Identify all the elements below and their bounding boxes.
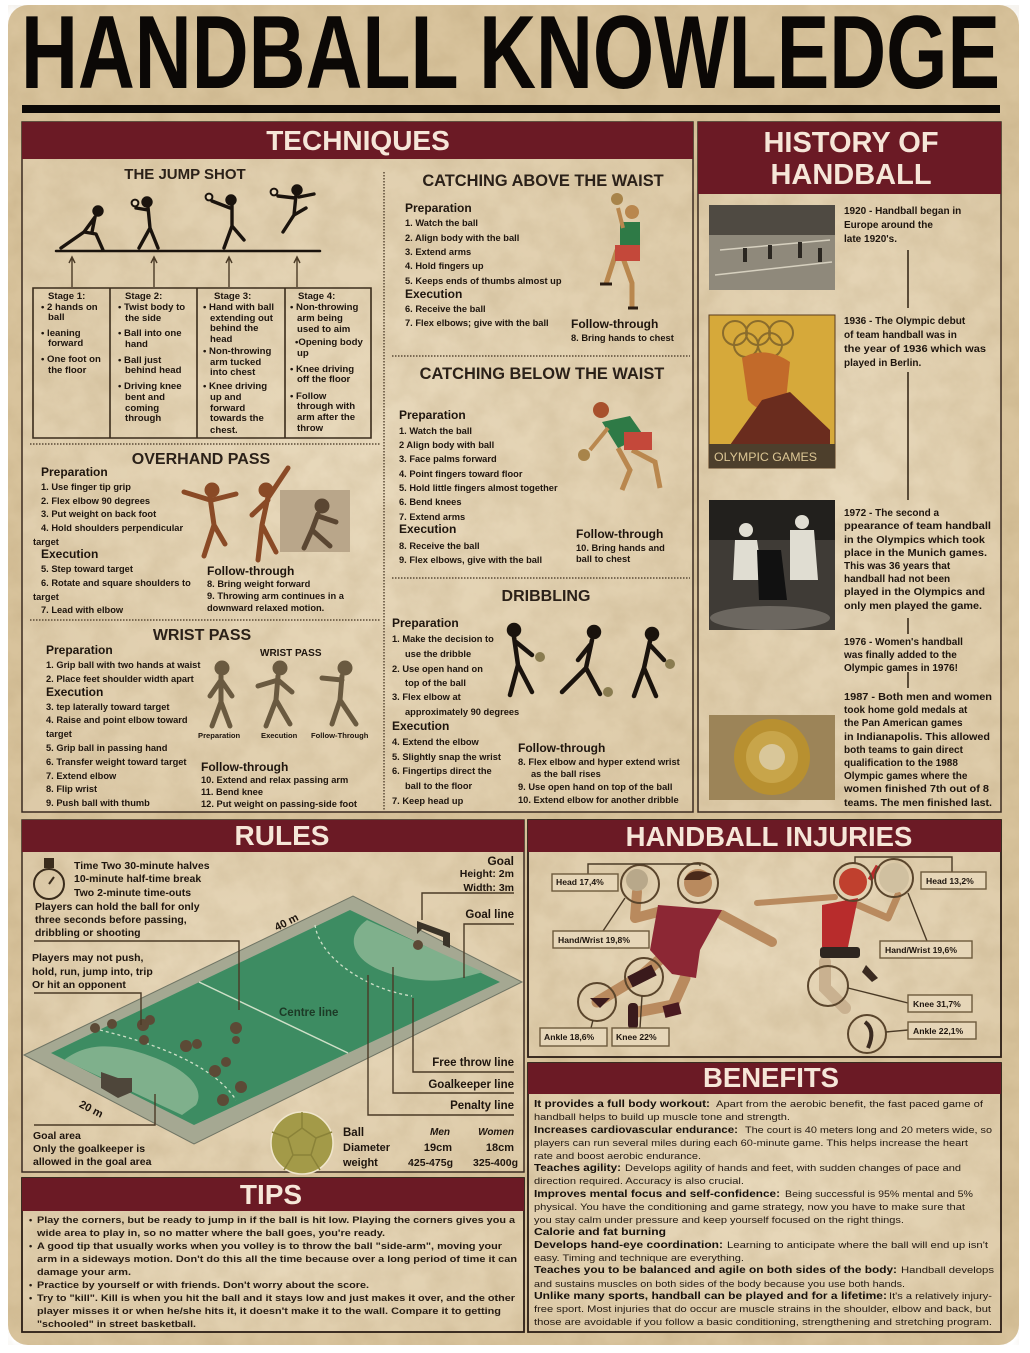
injury circles bbox=[578, 859, 913, 1053]
section: wrist pass: Execution bbox=[46, 685, 103, 699]
benefits list: Being successful is 95% mental and 5% bbox=[785, 1189, 974, 1200]
benefits list: direction required. Accuracy is also crucial. bbox=[534, 1176, 744, 1187]
section: wrist pass: 1. Grip ball with two hands at waist bbox=[46, 660, 200, 670]
text: goal: Height: 2m bbox=[460, 868, 514, 880]
icon: wrist pass figures bbox=[210, 663, 356, 726]
stage 4 text: off the floor bbox=[297, 374, 351, 385]
text: 1987: teams. The men finished last. bbox=[844, 798, 992, 809]
section: overhand pass: 6. Rotate and square shoulders to bbox=[41, 578, 191, 588]
benefits list: handball helps to build up muscle tone and strength. bbox=[534, 1112, 790, 1123]
section: catching below the waist: 8. Receive the ball bbox=[399, 541, 480, 551]
ball size table: Diameter bbox=[343, 1142, 391, 1154]
stage 2 text: behind head bbox=[125, 365, 182, 376]
stage 4 text: up bbox=[297, 348, 309, 359]
players bbox=[90, 940, 423, 1106]
benefits list: Apart from the aerobic benefit, the fast paced game of bbox=[716, 1099, 983, 1110]
injury labels: Head 13,2% bbox=[926, 876, 974, 886]
section: catching below the waist: 3. Face palms forward bbox=[399, 454, 497, 464]
text: goal bbox=[460, 854, 514, 921]
benefits list: free sport. Most injuries that do occur are muscle strains in the shoulder, elbow and back, but bbox=[534, 1304, 991, 1315]
section: dribbling: 2. Use open hand on bbox=[392, 664, 483, 674]
section: dribbling: 4. Extend the elbow bbox=[392, 737, 480, 747]
section: catching above the waist: 5. Keeps ends of thumbs almost up bbox=[405, 276, 562, 286]
ball size table: Women bbox=[478, 1127, 514, 1138]
text: 1987 bbox=[843, 692, 992, 809]
injury labels: Knee 22% bbox=[616, 1032, 657, 1042]
section: overhand pass: Preparation bbox=[41, 465, 108, 479]
benefits list: Handball develops bbox=[901, 1265, 994, 1276]
text: goal: Goal line bbox=[465, 909, 514, 921]
section: catching above the waist bbox=[405, 172, 674, 343]
section: catching below the waist: ball to chest bbox=[576, 554, 630, 564]
section: overhand pass: 2. Flex elbow 90 degrees bbox=[41, 496, 150, 506]
section: dribbling: 5. Slightly snap the wrist bbox=[392, 752, 501, 762]
stage 3 text: Stage 3: bbox=[214, 291, 251, 302]
text: time rules: Two 2-minute time-outs bbox=[74, 887, 191, 899]
section: wrist pass: 2. Place feet shoulder width apart bbox=[46, 674, 194, 684]
tips list: Try to "kill". Kill is when you hit the ball and it stays low and just makes it over, and the other bbox=[37, 1293, 515, 1303]
text: 1936: 1936 - The Olympic debut bbox=[844, 316, 966, 327]
stage 2 text: • Ball just bbox=[118, 355, 162, 366]
heading: history bbox=[763, 127, 939, 191]
stage 3 text: • Hand with ball bbox=[203, 302, 274, 313]
ball size table: Men bbox=[430, 1127, 450, 1138]
section: catching above the waist: Follow-through bbox=[571, 317, 658, 331]
icon: near goal bbox=[101, 1072, 132, 1098]
section: wrist pass: 12. Put weight on passing-side foot bbox=[201, 799, 357, 809]
section: catching above the waist: CATCHING ABOVE THE WAIST bbox=[422, 172, 664, 190]
benefits list: rate and boost aerobic endurance. bbox=[534, 1151, 701, 1162]
injury labels: Knee 31,7% bbox=[913, 999, 961, 1009]
stage 4 text: arm being bbox=[297, 313, 343, 324]
benefits list: Improves mental focus and self-confidence: bbox=[534, 1188, 780, 1200]
stage 2 text: through bbox=[125, 413, 161, 424]
section: catching above the waist: 2. Align body with the ball bbox=[405, 233, 519, 243]
stage 1 text: • leaning bbox=[41, 328, 81, 339]
leader lines bbox=[34, 893, 514, 1125]
heading: history: HANDBALL bbox=[770, 159, 932, 191]
tips list: player misses it or when he/she hits it, it doesn't make it to the wall. Compare it to getting bbox=[37, 1306, 501, 1316]
section: wrist pass: Execution bbox=[261, 731, 298, 740]
section: wrist pass: 3. tep laterally toward target bbox=[46, 702, 169, 712]
text: line labels: Penalty line bbox=[450, 1100, 514, 1112]
text: 1976: was finally added to the bbox=[843, 650, 957, 661]
injury labels: Ankle 22,1% bbox=[913, 1026, 964, 1036]
section: wrist pass: 10. Extend and relax passing arm bbox=[201, 775, 348, 785]
photo: gold medal bbox=[709, 715, 835, 800]
stage 3 text: • Non-throwing bbox=[203, 346, 272, 357]
section: catching above the waist: 7. Flex elbows; give with the ball bbox=[405, 318, 549, 328]
icon: catching above figure bbox=[600, 193, 640, 308]
text: time rules: 10-minute half-time break bbox=[74, 873, 201, 885]
icon: catching below figure bbox=[578, 402, 660, 490]
stage 2 text: • Driving knee bbox=[118, 381, 182, 392]
benefits list: physical. You have the conditioning and game strategy, now you have to make sure that bbox=[534, 1202, 965, 1213]
tips list: damage your arm. bbox=[37, 1267, 131, 1277]
section: catching below the waist bbox=[399, 365, 665, 565]
text: time rules: Time Two 30-minute halves bbox=[74, 860, 210, 872]
poster: 1936 olympics: OLYMPIC GAMES bbox=[714, 450, 817, 464]
section: wrist pass: 6. Transfer weight toward target bbox=[46, 757, 187, 767]
section: dribbling: Execution bbox=[392, 719, 449, 733]
heading: rules: RULES bbox=[235, 820, 329, 851]
icon: overhand pass figures bbox=[184, 468, 350, 560]
heading: injuries: HANDBALL INJURIES bbox=[626, 821, 912, 852]
section: dribbling: 7. Keep head up bbox=[392, 796, 464, 806]
text: 1987: Olympic games where the bbox=[844, 771, 968, 782]
section: overhand pass: 9. Throwing arm continues in a bbox=[207, 591, 345, 601]
section: dribbling: ball to the floor bbox=[405, 781, 473, 791]
injury labels: Head 17,4% bbox=[556, 877, 604, 887]
stage 2 text: hand bbox=[125, 339, 148, 350]
text: goal area: Only the goalkeeper is bbox=[33, 1143, 145, 1155]
icon: jump shot figures bbox=[56, 186, 320, 251]
stage 3 text: into chest bbox=[210, 367, 256, 378]
section: dribbling: top of the ball bbox=[405, 678, 466, 688]
section: catching above the waist: Preparation bbox=[405, 201, 472, 215]
section: catching above the waist: 1. Watch the ball bbox=[405, 218, 478, 228]
section: the jump shot bbox=[33, 166, 371, 438]
section: dribbling: 6. Fingertips direct the bbox=[392, 766, 492, 776]
text: line labels: Goalkeeper line bbox=[428, 1079, 514, 1091]
benefits list: Teaches you to be balanced and agile on both sides of the body: bbox=[534, 1264, 897, 1276]
section: catching above the waist: Execution bbox=[405, 287, 462, 301]
section: wrist pass: Follow-through bbox=[201, 760, 288, 774]
section: wrist pass: 8. Flip wrist bbox=[46, 784, 97, 794]
section: catching below the waist: Preparation bbox=[399, 408, 466, 422]
section: catching below the waist: 9. Flex elbows, give with the ball bbox=[399, 555, 542, 565]
tips list: Play the corners, but be ready to jump in if the ball is hit low. Playing the corners gives you a bbox=[37, 1215, 516, 1225]
tips list: "schooled" in street basketball. bbox=[37, 1319, 196, 1329]
text: 1987: both teams to gain direct bbox=[844, 745, 964, 756]
section: dribbling: Follow-through bbox=[518, 741, 605, 755]
stage table bbox=[33, 288, 371, 438]
text: 1987: qualification to the 1988 bbox=[844, 758, 958, 769]
section: overhand pass: OVERHAND PASS bbox=[132, 451, 271, 468]
icon: male player bbox=[590, 869, 772, 1029]
text: 1987: women finished 7th out of 8 bbox=[843, 784, 989, 795]
arrows to stages bbox=[69, 257, 300, 287]
injury labels bbox=[540, 872, 986, 1046]
tips list: Practice by yourself or with friends. Don't worry about the score. bbox=[37, 1280, 369, 1290]
stage 4 text: • Non-throwing bbox=[290, 302, 359, 313]
section: overhand pass: 8. Bring weight forward bbox=[207, 579, 311, 589]
section: wrist pass: 11. Bend knee bbox=[201, 787, 263, 797]
stage 3 text: head bbox=[210, 334, 233, 345]
ball size table: weight bbox=[342, 1157, 378, 1169]
stage 4 text: used to aim bbox=[297, 324, 350, 335]
section: wrist pass: Follow-Through bbox=[311, 731, 369, 740]
section: wrist pass bbox=[46, 627, 369, 809]
benefits list: The court is 40 meters long and 20 meters wide, so bbox=[745, 1125, 992, 1136]
tips list: • bbox=[29, 1293, 32, 1303]
section: wrist pass: Preparation bbox=[198, 731, 241, 740]
ball size table: 19cm bbox=[424, 1142, 452, 1154]
section: dribbling: 1. Make the decision to bbox=[392, 634, 494, 644]
stage 1 text: • One foot on bbox=[41, 354, 101, 365]
stage 2 text: coming bbox=[125, 403, 159, 414]
benefits list: and sustains muscles on both sides of the body because you use both hands. bbox=[534, 1279, 905, 1290]
heading: history: HISTORY OF bbox=[763, 127, 939, 159]
text: time rules: Players can hold the ball for only bbox=[35, 901, 200, 913]
tips list: wide area to play in, so no matter where the ball goes, you're ready. bbox=[36, 1228, 385, 1238]
ball size table: 18cm bbox=[486, 1142, 514, 1154]
section: wrist pass: WRIST PASS bbox=[153, 627, 252, 644]
text: 1976: Olympic games in 1976! bbox=[844, 663, 958, 674]
section: catching below the waist: Execution bbox=[399, 522, 456, 536]
section: dribbling: as the ball rises bbox=[531, 769, 601, 779]
benefits list: Unlike many sports, handball can be played and for a lifetime: bbox=[534, 1290, 887, 1302]
section: catching below the waist: 1. Watch the ball bbox=[399, 426, 472, 436]
panel: history of handball bbox=[698, 122, 1001, 812]
section: wrist pass: target bbox=[46, 729, 72, 739]
icon: dribbling figures bbox=[509, 625, 675, 697]
section: overhand pass: target bbox=[33, 537, 59, 547]
text: 1972 bbox=[844, 508, 991, 612]
ball size table: 325-400g bbox=[473, 1157, 518, 1169]
heading: techniques: TECHNIQUES bbox=[266, 125, 450, 156]
panel: rules bbox=[22, 820, 524, 1174]
benefits list: It provides a full body workout: bbox=[534, 1098, 710, 1110]
section: overhand pass: 3. Put weight on back foot bbox=[41, 509, 156, 519]
section: overhand pass: Follow-through bbox=[207, 564, 294, 578]
photo: 1920 match bbox=[709, 205, 835, 290]
section: catching below the waist: 2 Align body with ball bbox=[399, 440, 494, 450]
benefits list: those are avoidable if you follow a basic conditioning, strengthening and stretching program. bbox=[534, 1317, 992, 1328]
text: 1972: ppearance of team handball bbox=[844, 521, 991, 532]
stage 3 text: up and bbox=[210, 392, 242, 403]
benefits list: players can run several miles during each 60-minute game. This helps increase the heart bbox=[534, 1138, 968, 1149]
icon: stopwatch bbox=[34, 859, 64, 899]
section: wrist pass: Preparation bbox=[46, 643, 113, 657]
section: overhand pass: Execution bbox=[41, 547, 98, 561]
tips list: • bbox=[29, 1280, 32, 1290]
stage 1 text: ball bbox=[48, 312, 65, 323]
benefits list: It's a relatively injury- bbox=[889, 1291, 992, 1302]
text: goal area bbox=[33, 1130, 152, 1168]
stage 1 text bbox=[41, 291, 101, 376]
section: dribbling: DRIBBLING bbox=[502, 588, 590, 605]
benefits list: Calorie and fat burning bbox=[534, 1226, 666, 1238]
stage 3 text: behind the bbox=[210, 323, 258, 334]
panel: handball injuries bbox=[528, 820, 1001, 1057]
section: dribbling: 9. Use open hand on top of the ball bbox=[518, 782, 672, 792]
section: wrist pass: WRIST PASS bbox=[260, 648, 322, 659]
stage 2 text: the side bbox=[125, 313, 161, 324]
text: 1936 bbox=[844, 316, 986, 369]
section: overhand pass: target bbox=[33, 592, 59, 602]
section: dribbling: 10. Extend elbow for another dribble bbox=[518, 795, 679, 805]
text: 1972: handball had not been bbox=[844, 574, 950, 585]
section: overhand pass: 1. Use finger tip grip bbox=[41, 482, 131, 492]
stage 3 text bbox=[203, 291, 274, 436]
benefits list: Increases cardiovascular endurance: bbox=[534, 1124, 738, 1136]
section: catching below the waist: 6. Bend knees bbox=[399, 497, 462, 507]
injury labels: Hand/Wrist 19,6% bbox=[885, 945, 957, 955]
icon: female player bbox=[757, 863, 909, 1048]
text: 1972: in the Olympics which took bbox=[844, 535, 985, 546]
section: dribbling bbox=[392, 588, 680, 806]
title rule bbox=[22, 105, 1000, 113]
text: 1972: only men played the game. bbox=[844, 601, 982, 612]
text: fouls: Or hit an opponent bbox=[32, 979, 126, 991]
text: 1987: the Pan American games bbox=[844, 718, 963, 729]
stage 4 text: Stage 4: bbox=[298, 291, 335, 302]
text: fouls: hold, run, jump into, trip bbox=[32, 966, 153, 978]
benefits list: easy. Timing and technique are everything. bbox=[534, 1253, 744, 1264]
section: overhand pass: 7. Lead with elbow bbox=[41, 605, 124, 615]
section: wrist pass: 7. Extend elbow bbox=[46, 771, 117, 781]
stage 3 text: extending out bbox=[210, 313, 274, 324]
stage 4 text: • Follow bbox=[290, 391, 327, 402]
text: goal: Width: 3m bbox=[463, 882, 514, 894]
text: 1987: in Indianapolis. This allowed bbox=[844, 732, 990, 743]
section: overhand pass bbox=[33, 451, 350, 615]
photo: 1972 match bbox=[709, 500, 835, 630]
text: time rules: three seconds before passing, bbox=[35, 914, 187, 926]
text: 1976 bbox=[843, 637, 963, 674]
icon: far goal bbox=[417, 921, 450, 948]
text: line labels bbox=[428, 1057, 514, 1112]
injury labels: Ankle 18,6% bbox=[544, 1032, 595, 1042]
text: 1920 bbox=[844, 206, 961, 245]
text: time rules: dribbling or shooting bbox=[35, 927, 141, 939]
text: 1976: 1976 - Women's handball bbox=[844, 637, 963, 648]
stage 3 text: forward bbox=[210, 403, 245, 414]
stage 4 text: throw bbox=[297, 423, 324, 434]
section: wrist pass: 4. Raise and point elbow toward bbox=[46, 715, 188, 725]
text: 1972: place in the Munich games. bbox=[844, 548, 987, 559]
text: 1987: took home gold medals at bbox=[844, 705, 968, 716]
label: centre line: Centre line bbox=[279, 1007, 338, 1019]
tips list: A good tip that usually works when you volley is to throw the ball "side-arm", moving your bbox=[37, 1241, 502, 1251]
stage 2 text bbox=[118, 291, 185, 424]
text: fouls bbox=[32, 952, 153, 991]
injury labels: Hand/Wrist 19,8% bbox=[558, 935, 630, 945]
text: 1972: This was 36 years that bbox=[844, 561, 951, 572]
poster: 1936 olympics bbox=[709, 315, 835, 468]
stage 2 text: bent and bbox=[125, 392, 165, 403]
benefits list: Teaches agility: bbox=[534, 1162, 621, 1174]
ball size table bbox=[342, 1127, 518, 1169]
text: line labels: Free throw line bbox=[432, 1057, 514, 1069]
stage 4 text: arm after the bbox=[297, 412, 355, 423]
benefits list bbox=[534, 1098, 994, 1328]
panel: tips bbox=[22, 1178, 524, 1332]
heading: benefits: BENEFITS bbox=[703, 1062, 839, 1093]
ball size table: 425-475g bbox=[408, 1157, 453, 1169]
tips list: • bbox=[29, 1215, 32, 1225]
text: 1920: 1920 - Handball began in bbox=[844, 206, 961, 217]
stage 2 text: • Ball into one bbox=[118, 328, 182, 339]
text: 1920: late 1920's. bbox=[844, 234, 897, 245]
text: 1920: Europe around the bbox=[844, 220, 933, 231]
section: catching below the waist: 7. Extend arms bbox=[399, 512, 465, 522]
stage 4 text: • Knee driving bbox=[290, 364, 354, 375]
stage 3 text: chest. bbox=[210, 425, 238, 436]
stage 4 text bbox=[290, 291, 364, 434]
text: goal: Goal bbox=[487, 854, 514, 868]
stage 1 text: the floor bbox=[48, 365, 87, 376]
text: 1972: 1972 - The second a bbox=[844, 508, 939, 519]
stage 1 text: Stage 1: bbox=[48, 291, 85, 302]
stage 3 text: towards the bbox=[210, 413, 264, 424]
section: dribbling: use the dribble bbox=[405, 649, 471, 659]
chart: isometric court bbox=[24, 896, 522, 1144]
section: catching above the waist: 6. Receive the ball bbox=[405, 304, 486, 314]
section: catching below the waist: Follow-through bbox=[576, 527, 663, 541]
section: overhand pass: 4. Hold shoulders perpendicular bbox=[41, 523, 183, 533]
icon: ball bbox=[271, 1112, 333, 1174]
section: catching below the waist: CATCHING BELOW THE WAIST bbox=[420, 365, 664, 383]
text: 1936: played in Berlin. bbox=[844, 358, 921, 369]
stage 2 text: Stage 2: bbox=[125, 291, 162, 302]
text: 1972: played in the Olympics and bbox=[844, 587, 985, 598]
label: 20 m: 20 m bbox=[77, 1099, 105, 1121]
benefits list: Develops hand-eye coordination: bbox=[534, 1239, 723, 1251]
label: 40 m: 40 m bbox=[273, 912, 301, 934]
stage 1 text: forward bbox=[48, 338, 83, 349]
stage 3 text: arm tucked bbox=[210, 357, 261, 368]
benefits list: Develops agility of hands and feet, with sudden changes of pace and bbox=[625, 1163, 961, 1174]
ball size table: Ball bbox=[343, 1127, 364, 1139]
section: wrist pass: 5. Grip ball in passing hand bbox=[46, 743, 168, 753]
section: dribbling: approximately 90 degrees bbox=[405, 707, 519, 717]
section: catching below the waist: 5. Hold little fingers almost together bbox=[399, 483, 558, 493]
injury leader lines bbox=[588, 857, 952, 1032]
section: wrist pass: 9. Push ball with thumb bbox=[46, 798, 150, 808]
stage 4 text: •Opening body bbox=[295, 337, 364, 348]
section: overhand pass: 5. Step toward target bbox=[41, 564, 133, 574]
text: goal area: allowed in the goal area bbox=[33, 1156, 152, 1168]
stage 4 text: through with bbox=[297, 401, 355, 412]
text: time rules bbox=[35, 860, 210, 939]
section: the jump shot: THE JUMP SHOT bbox=[124, 166, 246, 183]
text: 1936: of team handball was in bbox=[844, 330, 957, 341]
section: catching above the waist: 3. Extend arms bbox=[405, 247, 471, 257]
text: 1987: 1987 - Both men and women bbox=[844, 692, 992, 703]
section: dribbling: 8. Flex elbow and hyper extend wrist bbox=[518, 757, 680, 767]
tips list bbox=[29, 1215, 517, 1329]
text: 1936: the year of 1936 which was bbox=[844, 344, 986, 355]
benefits list: you stay calm under pressure and keep yourself focused on the right things. bbox=[534, 1215, 904, 1226]
section: overhand pass: downward relaxed motion. bbox=[207, 603, 324, 613]
tips list: arm in a sideways motion. Don't do this all the time because over a long period of time it can bbox=[37, 1254, 517, 1264]
heading: tips: TIPS bbox=[240, 1179, 302, 1210]
section: catching below the waist: 10. Bring hands and bbox=[576, 543, 665, 553]
benefits list: Learning to anticipate where the ball will end up isn't bbox=[727, 1240, 988, 1251]
section: catching above the waist: 4. Hold fingers up bbox=[405, 261, 484, 271]
text: fouls: Players may not push, bbox=[32, 952, 144, 964]
tips list: • bbox=[29, 1241, 32, 1251]
panel: benefits bbox=[528, 1062, 1001, 1332]
text: goal area: Goal area bbox=[33, 1130, 81, 1142]
stage 3 text: • Knee driving bbox=[203, 381, 267, 392]
section: dribbling: Preparation bbox=[392, 616, 459, 630]
section: catching below the waist: 4. Point fingers toward floor bbox=[399, 469, 523, 479]
section: dribbling: 3. Flex elbow at bbox=[392, 692, 461, 702]
section: catching above the waist: 8. Bring hands to chest bbox=[571, 333, 674, 343]
stage 2 text: • Twist body to bbox=[118, 302, 185, 313]
stage 1 text: • 2 hands on bbox=[41, 302, 98, 313]
panel: techniques bbox=[22, 122, 693, 812]
